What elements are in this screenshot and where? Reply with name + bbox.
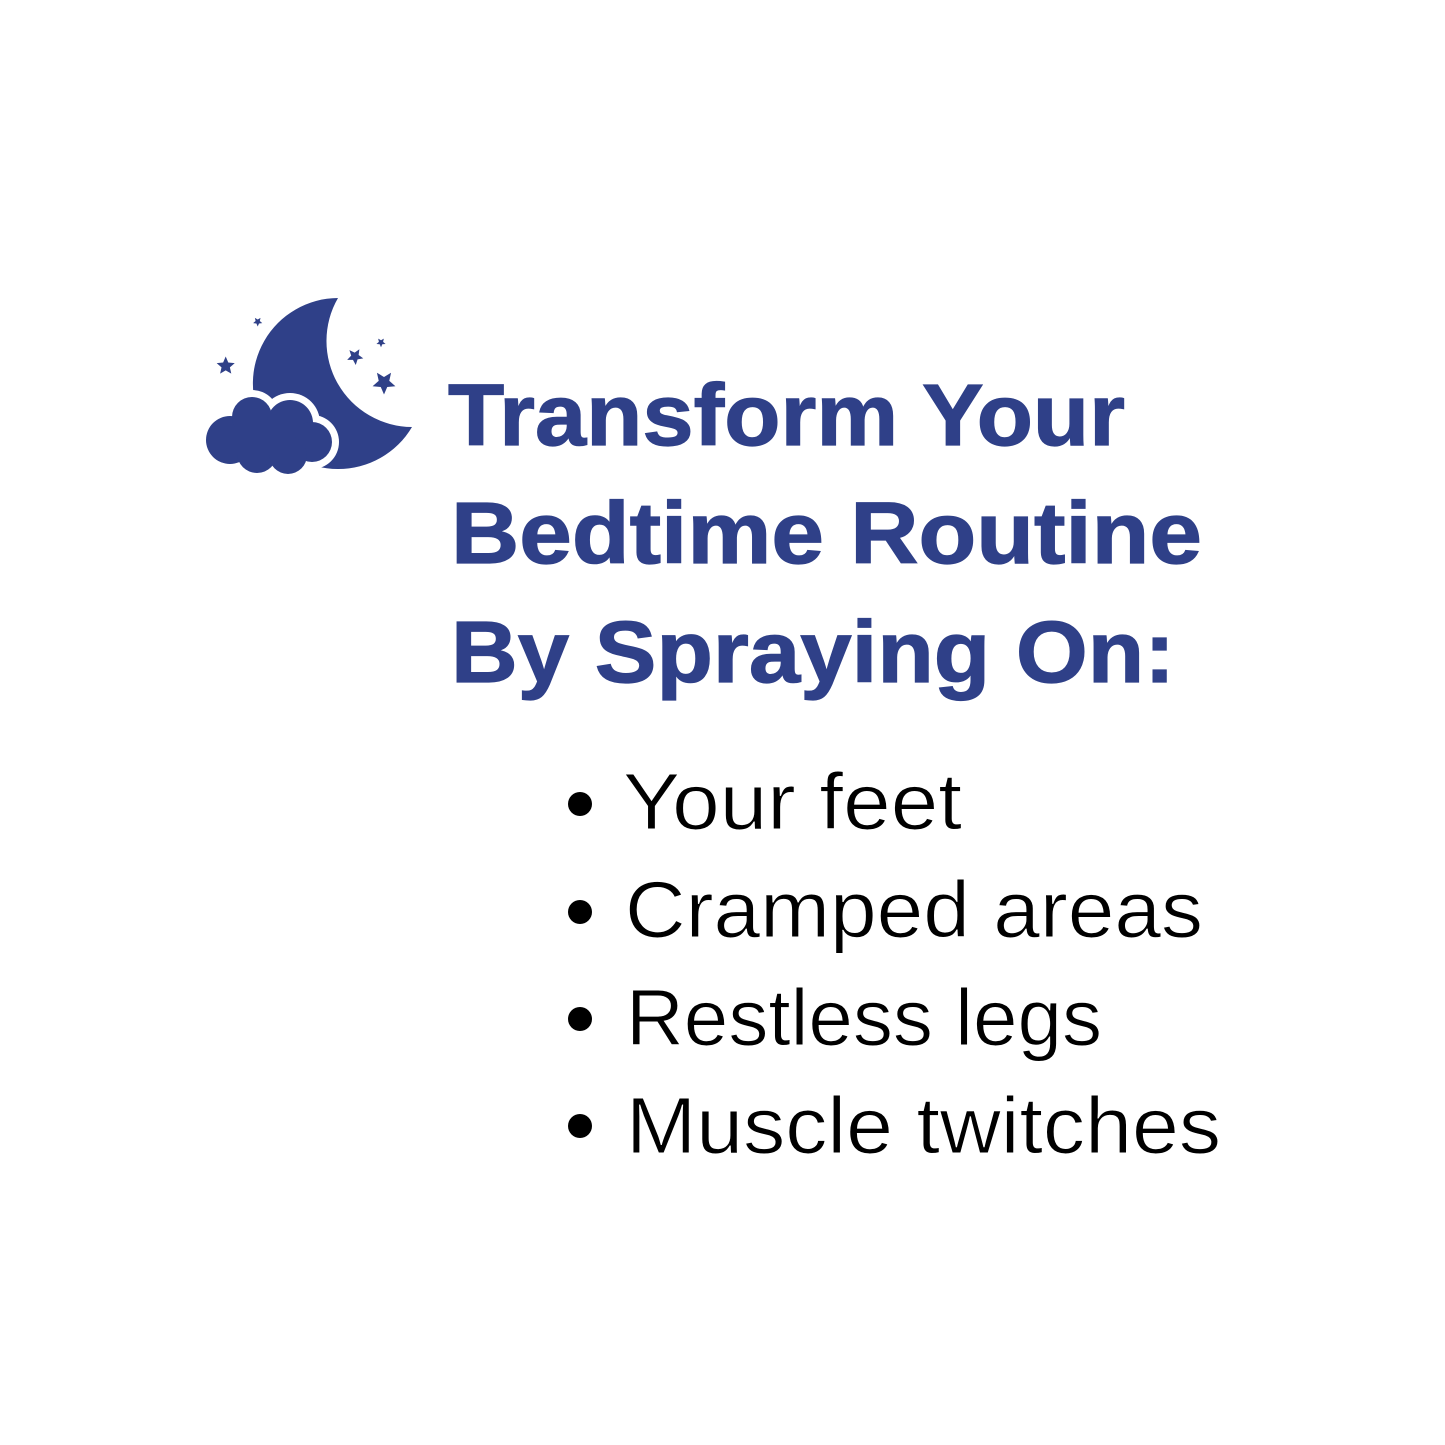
bullet: muscle twitches: Muscle twitches: [626, 1081, 1221, 1170]
icon: star top left: [253, 318, 262, 326]
cloud halo: [225, 390, 339, 481]
icon: star small right: [376, 339, 386, 347]
bullet: restless legs: Restless legs: [626, 973, 1102, 1062]
title line 2: Bedtime Routine: [451, 485, 1202, 582]
title line 1: Transform Your: [448, 367, 1125, 464]
icon: cloud: [206, 390, 339, 481]
title line 3: By Spraying On:: [451, 604, 1175, 701]
icon: crescent moon: [253, 298, 412, 469]
icon: star lower right: [373, 373, 395, 394]
bullet: cramped areas: Cramped areas: [625, 865, 1203, 954]
icon: star left: [217, 356, 235, 374]
bullet: your feet: Your feet: [623, 757, 962, 846]
icon: moon, cloud and stars: [206, 298, 412, 481]
bullet list: [568, 757, 1221, 1170]
title: [448, 367, 1202, 701]
icon: star centre right: [346, 349, 364, 366]
